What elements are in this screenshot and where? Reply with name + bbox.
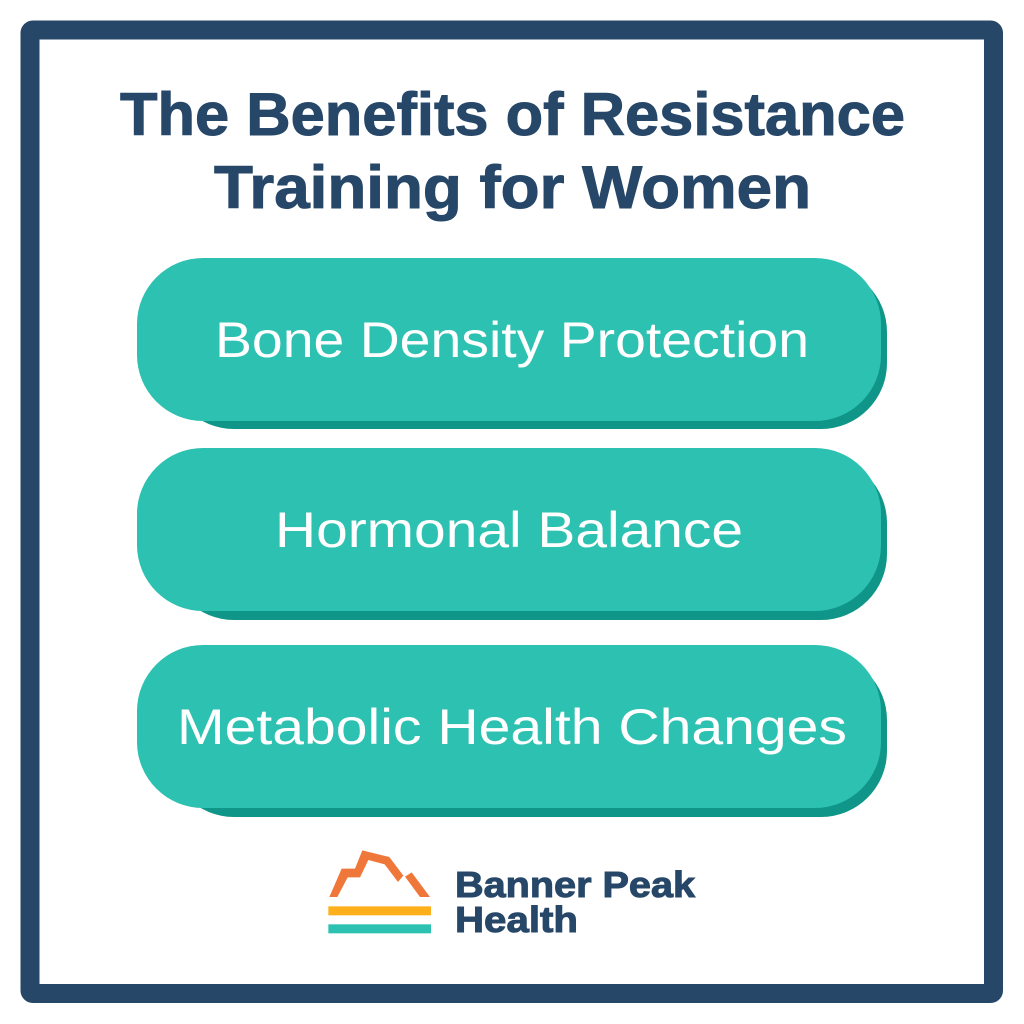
title: Training for Women (214, 154, 811, 221)
logo: Banner Peak Health (328, 850, 696, 940)
title: The Benefits of Resistance (120, 81, 905, 148)
panel: metabolic health changes (137, 645, 887, 817)
panel: bone density protection (137, 258, 887, 429)
panel: bone density protection: Bone Density Protection (215, 312, 809, 368)
panel: hormonal balance (137, 448, 887, 620)
logo wordmark: Banner Peak (455, 864, 696, 905)
icon: mountain with orange and teal bars (328, 850, 431, 933)
panel: metabolic health changes: Metabolic Health Changes (177, 699, 847, 755)
logo wordmark (455, 864, 696, 940)
logo wordmark: Health (455, 899, 578, 940)
title (120, 81, 905, 221)
panel: hormonal balance: Hormonal Balance (275, 502, 743, 558)
